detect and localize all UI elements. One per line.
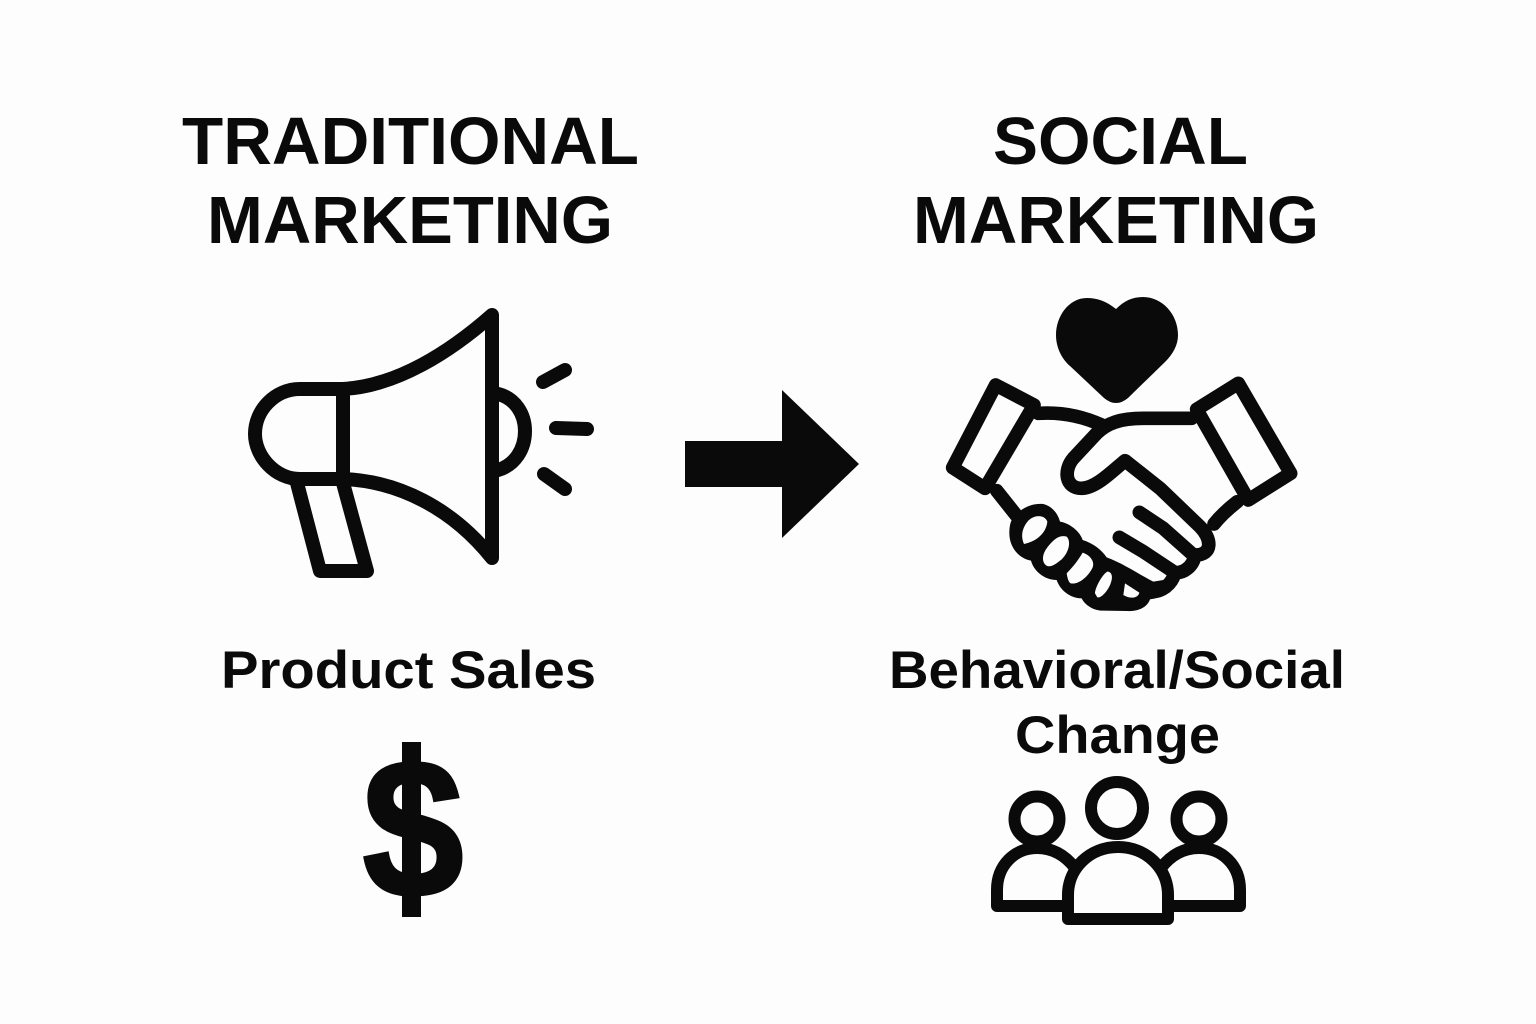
label: behavioral/social change: Change	[1015, 706, 1220, 765]
heading: social marketing: MARKETING	[913, 183, 1319, 258]
heading: traditional marketing	[182, 104, 639, 258]
label: product sales: Product Sales	[221, 641, 596, 700]
icon: group of people	[997, 782, 1240, 919]
heading: social marketing	[913, 104, 1319, 258]
heading: social marketing: SOCIAL	[993, 104, 1248, 179]
arrow	[685, 390, 859, 538]
icon: megaphone	[255, 315, 587, 571]
icon: handshake	[953, 383, 1291, 611]
icon: heart	[1056, 297, 1178, 403]
label: behavioral/social change: Behavioral/Social	[889, 641, 1345, 700]
label: behavioral/social change	[889, 641, 1345, 765]
icon: dollar sign: $	[362, 719, 464, 940]
heading: traditional marketing: MARKETING	[207, 183, 613, 258]
heading: traditional marketing: TRADITIONAL	[182, 104, 639, 179]
